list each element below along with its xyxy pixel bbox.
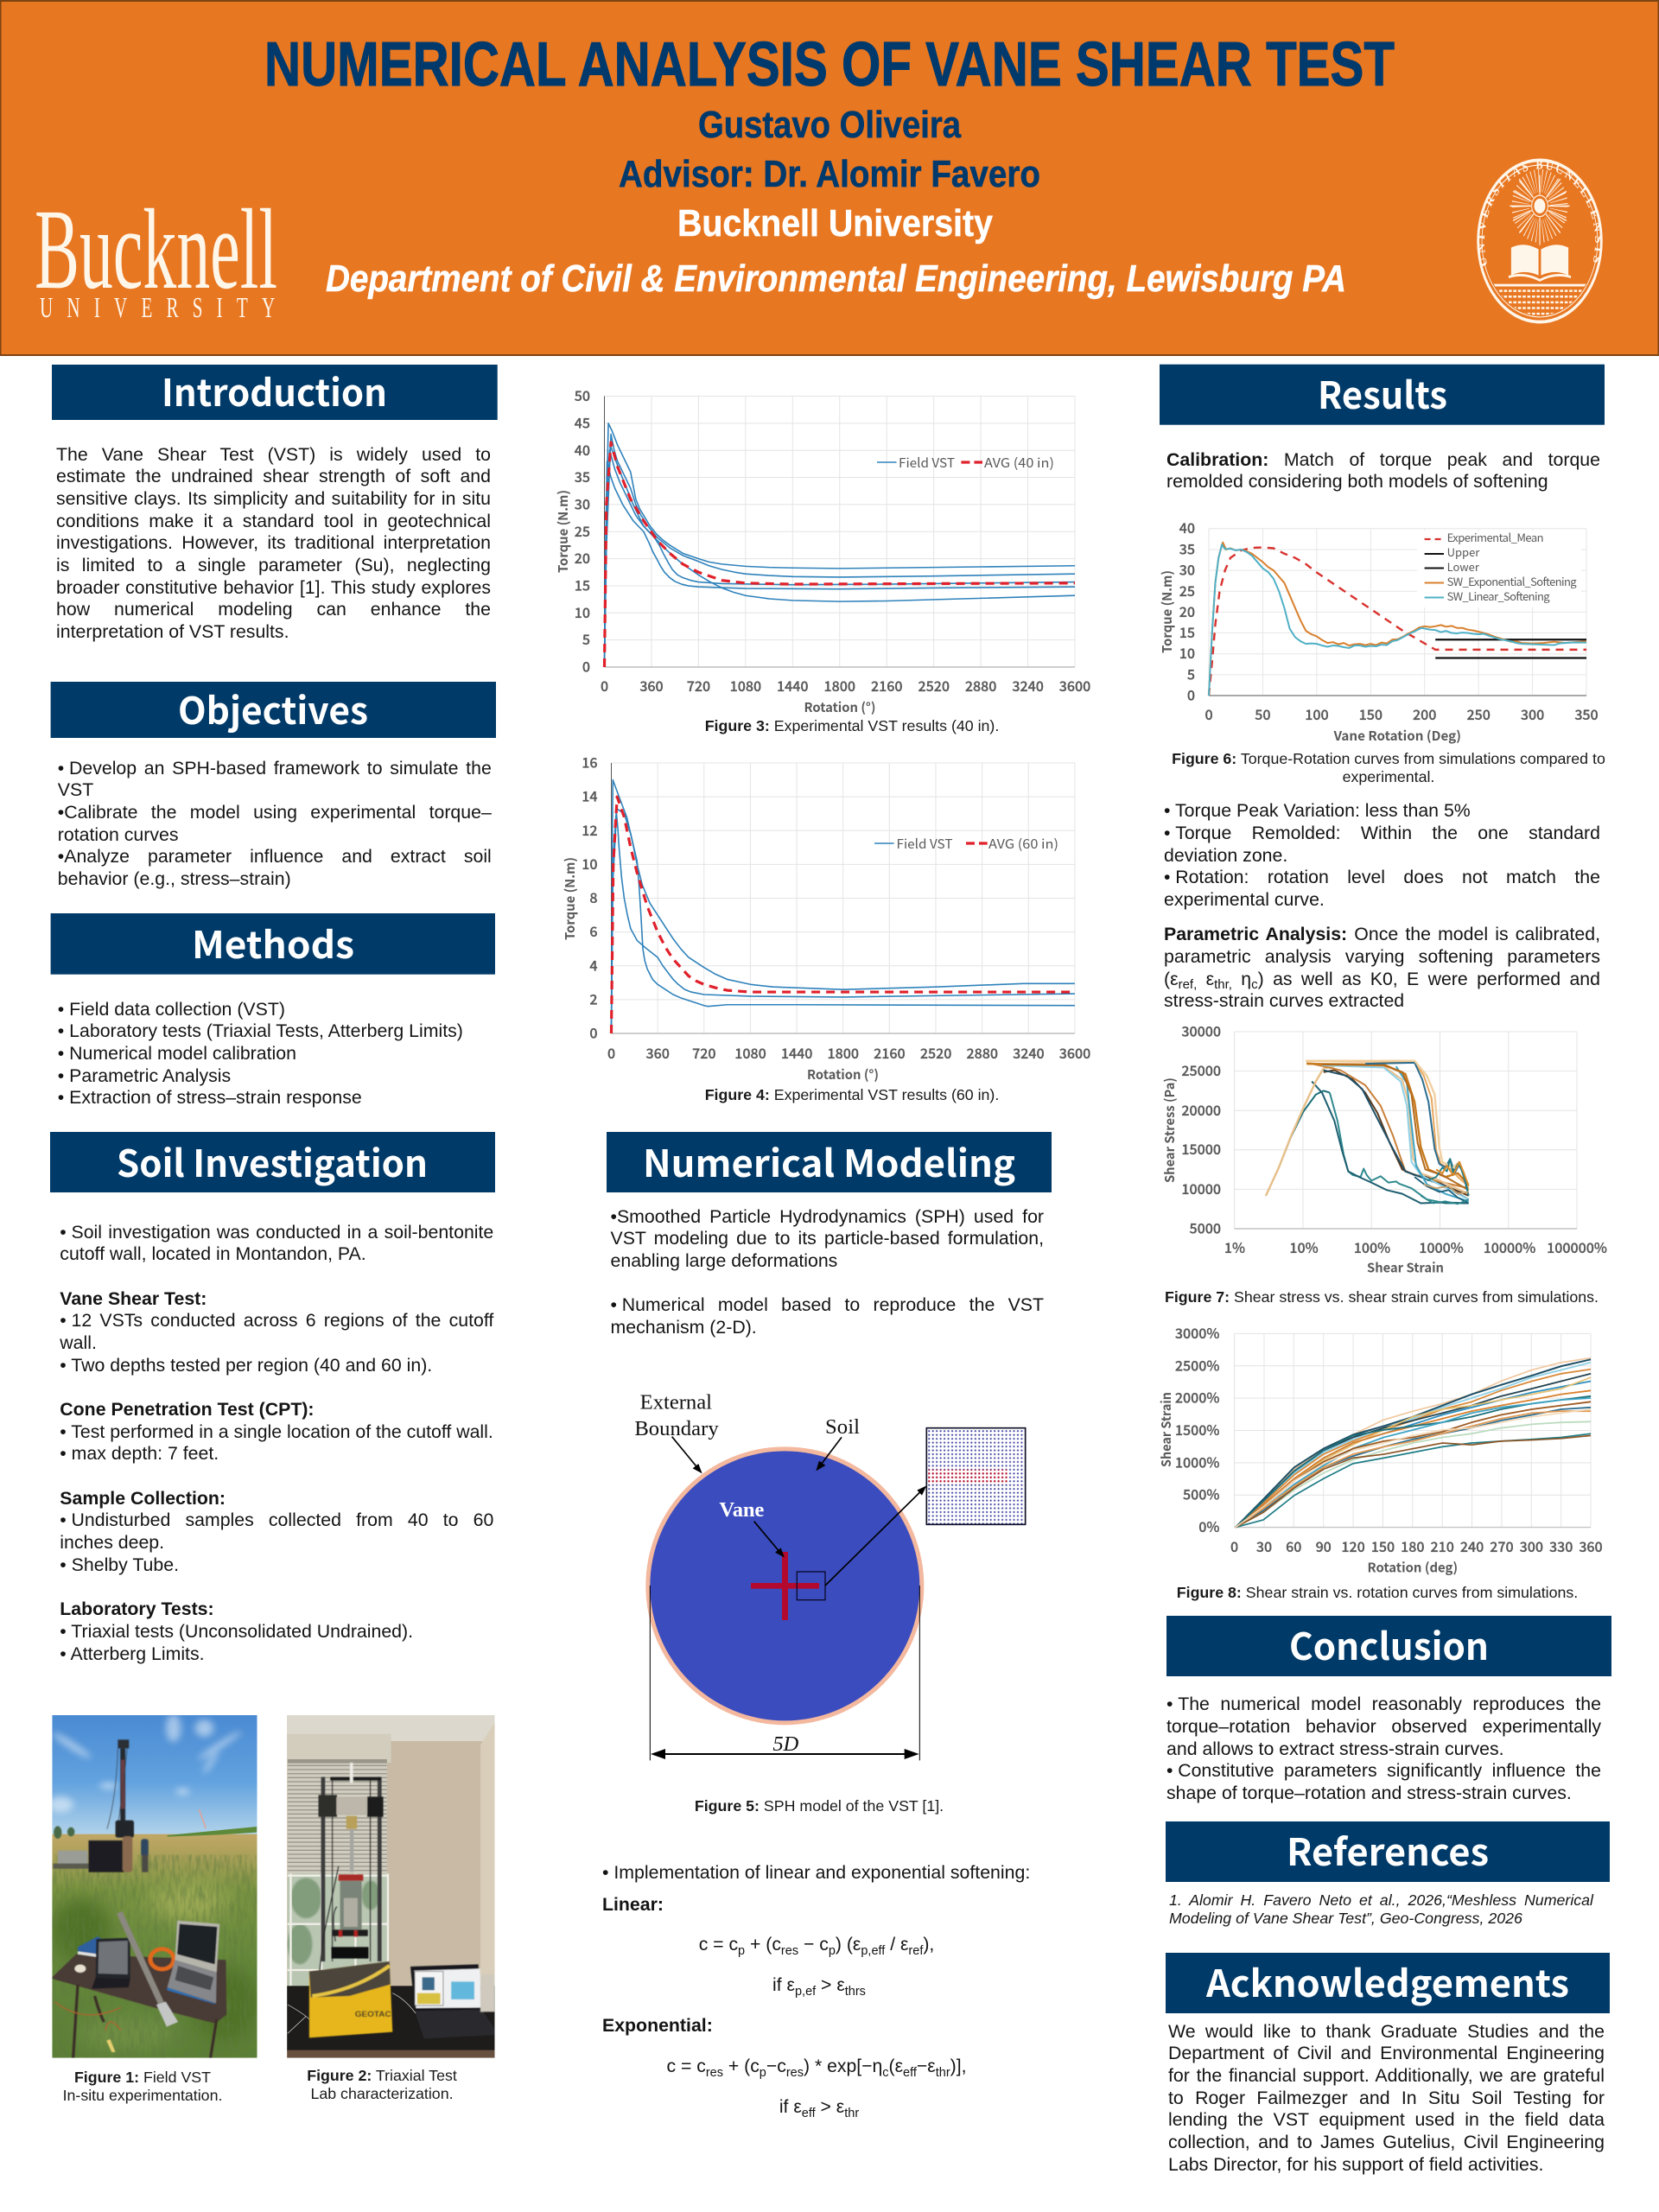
chart: Figure 7 shear stress vs shear strain: 15000 — [1181, 1138, 1221, 1159]
text block: calibration: Calibration: Match of torque peak and torque — [1166, 449, 1600, 470]
text block: soil investigation: • — [60, 1310, 67, 1331]
chart: Figure 8 shear strain vs rotation: 360 — [1579, 1535, 1603, 1556]
chart: Figure 6 torque-rotation simulations vs experimental: 35 — [1179, 537, 1195, 558]
chart: Figure 8 shear strain vs rotation — [1157, 1322, 1603, 1577]
chart: Figure 7 shear stress vs shear strain: 1% — [1224, 1236, 1245, 1257]
text block: methods: • Laboratory tests (Triaxial Tests, Atterberg Limits) — [58, 1020, 463, 1041]
text block: objectives: Develop an SPH-based framework to simulate the — [69, 757, 492, 778]
text block: acknowledgements: collection, and to James Gutelius, Civil Engineering — [1168, 2132, 1605, 2152]
text block: soil investigation: • Triaxial tests (Unconsolidated Undrained). — [60, 1621, 413, 1642]
text block: numerical modeling: mechanism (2-D). — [610, 1317, 757, 1338]
chart: Figure 7 shear stress vs shear strain: 20000 — [1181, 1099, 1221, 1120]
heading: Soil Investigation: Soil Investigation — [117, 1135, 428, 1188]
chart: Figure 3 torque vs rotation, 40 in: 20 — [575, 547, 590, 568]
chart legend: Figure 6: SW_Exponential_Softening — [1447, 573, 1577, 589]
text block: soil investigation: Soil investigation was conducted in a soil-bentonite — [71, 1222, 493, 1243]
chart: Figure 7 shear stress vs shear strain: 100000% — [1547, 1236, 1607, 1257]
chart: Figure 4 torque vs rotation, 60 in: 720 — [692, 1042, 715, 1063]
chart: Figure 7 shear stress vs shear strain: 25000 — [1181, 1059, 1221, 1080]
chart: Figure 4 torque vs rotation, 60 in: 10 — [582, 853, 598, 874]
chart: Figure 3 torque vs rotation, 40 in: Rotation (°) — [804, 698, 876, 716]
text block: calibration findings: • — [1164, 823, 1170, 843]
chart: Figure 4 torque vs rotation, 60 in: 0 — [589, 1021, 598, 1042]
chart: Figure 8 shear strain vs rotation: Rotation (deg) — [1367, 1559, 1458, 1577]
chart: Figure 4 torque vs rotation, 60 in — [561, 752, 1090, 1084]
chart: Figure 8 shear strain vs rotation: 60 — [1286, 1535, 1301, 1556]
text block: objectives: VST — [58, 779, 93, 800]
text block: soil investigation: Undisturbed samples collected from 40 to 60 — [71, 1510, 493, 1530]
diagram labels — [634, 1391, 860, 1756]
heading: Introduction: Introduction — [162, 364, 387, 417]
text block: objectives: behavior (e.g., stress–strain) — [58, 868, 291, 889]
caption: figure 4: Figure 4: Experimental VST results (60 in). — [705, 1086, 999, 1103]
chart legend: Figure 3: AVG (40 in) — [984, 454, 1054, 472]
chart: Figure 8 shear strain vs rotation: 120 — [1341, 1535, 1365, 1556]
text block: methods: • Numerical model calibration — [58, 1043, 296, 1064]
text block: conclusion: torque–rotation behavior observed experimentally — [1166, 1716, 1601, 1737]
icon: Bucknell wordmark: UNIVERSITY — [40, 292, 275, 324]
heading: linear softening: Linear: — [602, 1894, 664, 1915]
text block: numerical modeling: Numerical model based to reproduce the VST — [622, 1294, 1044, 1315]
chart: Figure 4 torque vs rotation, 60 in: 14 — [582, 785, 598, 806]
chart legend: Figure 6: Lower — [1447, 558, 1480, 575]
chart: Figure 3 torque vs rotation, 40 in: 2160 — [871, 675, 902, 696]
chart: Figure 4 torque vs rotation, 60 in: 1800 — [828, 1042, 859, 1063]
chart: Figure 8 shear strain vs rotation: 180 — [1401, 1535, 1424, 1556]
text block: conclusion: Constitutive parameters significantly influence the — [1178, 1760, 1601, 1781]
caption: figure 7: Figure 7: Shear stress vs. shear strain curves from simulations. — [1165, 1288, 1599, 1306]
title: NUMERICAL ANALYSIS OF VANE SHEAR TEST — [264, 29, 1395, 99]
chart: Figure 4 torque vs rotation, 60 in: 2520 — [920, 1042, 951, 1063]
chart: Figure 6 torque-rotation simulations vs experimental: 10 — [1179, 642, 1195, 663]
text block: acknowledgements: We would like to thank Graduate Studies and the — [1168, 2021, 1605, 2042]
text block: acknowledgements: Department of Civil and Environmental Engineering — [1168, 2043, 1605, 2063]
chart: Figure 8 shear strain vs rotation: 240 — [1460, 1535, 1484, 1556]
diagram labels: Vane — [719, 1498, 764, 1522]
text block: soil investigation: • Shelby Tube. — [60, 1554, 179, 1575]
chart: Figure 4 torque vs rotation, 60 in: 1080 — [734, 1042, 766, 1063]
chart: Figure 3 torque vs rotation, 40 in: 3240 — [1012, 675, 1044, 696]
chart: Figure 3 torque vs rotation, 40 in: 3600 — [1059, 675, 1090, 696]
heading: References — [1166, 1821, 1610, 1882]
text block: parametric analysis: (εref, εthr, ηc) as well as K0, E were performed and — [1164, 969, 1600, 992]
chart: Figure 8 shear strain vs rotation: 0 — [1230, 1535, 1238, 1556]
chart: Figure 6 torque-rotation simulations vs experimental — [1158, 517, 1599, 745]
chart legend: Figure 4 — [874, 835, 1058, 853]
chart: Figure 4 torque vs rotation, 60 in: 3240 — [1013, 1042, 1045, 1063]
chart: Figure 3 torque vs rotation, 40 in: 25 — [575, 520, 590, 541]
text block: acknowledgements — [1168, 2021, 1605, 2176]
chart: Figure 3 torque vs rotation, 40 in: 360 — [639, 675, 664, 696]
chart legend: Figure 6: SW_Linear_Softening — [1447, 588, 1550, 604]
heading: Introduction — [52, 364, 498, 420]
chart: Figure 4 torque vs rotation, 60 in: 8 — [589, 887, 598, 907]
caption: figure 5: Figure 5: SPH model of the VST [1]. — [695, 1797, 944, 1815]
chart: Figure 7 shear stress vs shear strain: 10000% — [1484, 1236, 1535, 1257]
caption: figure 2 — [307, 2067, 457, 2102]
chart: Figure 6 torque-rotation simulations vs experimental: 250 — [1467, 703, 1491, 724]
chart: Figure 3 torque vs rotation, 40 in: 0 — [601, 675, 608, 696]
text block: objectives — [57, 757, 492, 889]
text block: soil investigation: inches deep. — [60, 1532, 164, 1553]
chart: Figure 7 shear stress vs shear strain: Shear Stress (Pa) — [1160, 1077, 1179, 1183]
text block: conclusion: shape of torque–rotation and stress-strain curves. — [1166, 1783, 1572, 1803]
text block: calibration findings: Rotation: rotation level does not match the — [1175, 867, 1600, 887]
chart: Figure 6 torque-rotation simulations vs experimental: 25 — [1179, 580, 1195, 601]
load frame — [319, 1763, 384, 1981]
text block: numerical modeling — [610, 1206, 1044, 1338]
arrows and dimension lines — [650, 1437, 926, 1760]
chart: Figure 7 shear stress vs shear strain: 30000 — [1181, 1020, 1221, 1040]
text block: calibration findings: experimental curve. — [1164, 889, 1325, 910]
chart: Figure 8 shear strain vs rotation: 2000% — [1175, 1387, 1219, 1408]
heading: Numerical Modeling: Numerical Modeling — [643, 1135, 1015, 1188]
text block: soil investigation: cutoff wall, located in Montandon, PA. — [60, 1243, 366, 1264]
diagram: Figure 5 SPH model of the VST — [634, 1391, 1026, 1760]
text block: conclusion — [1166, 1694, 1601, 1803]
chart: Figure 7 shear stress vs shear strain: 1000% — [1419, 1236, 1464, 1257]
text block: soil investigation: • — [60, 1222, 67, 1243]
text block: objectives: •Calibrate the model using experimental torque– — [58, 802, 492, 823]
text block: soil investigation — [60, 1222, 494, 1664]
heading: References: References — [1287, 1823, 1489, 1877]
chart: Figure 8 shear strain vs rotation: Shear Strain — [1157, 1392, 1175, 1467]
text block: methods: • Parametric Analysis — [58, 1065, 231, 1086]
chart: Figure 7 shear stress vs shear strain: Shear Strain — [1367, 1259, 1444, 1277]
chart: Figure 8 shear strain vs rotation: 90 — [1316, 1535, 1332, 1556]
heading: Objectives: Objectives — [178, 682, 368, 735]
text block: introduction: how numerical modeling can enhance the — [56, 599, 491, 620]
chart legend: Figure 4: AVG (60 in) — [988, 835, 1058, 853]
text block: parametric analysis: Parametric Analysis: Once the model is calibrated, — [1164, 924, 1600, 944]
chart: Figure 3 torque vs rotation, 40 in: 2880 — [965, 675, 996, 696]
text block: introduction: interpretation of VST results. — [56, 621, 289, 642]
heading: Acknowledgements: Acknowledgements — [1205, 1955, 1569, 2008]
caption: figure 6 — [1172, 750, 1605, 785]
zoom box — [797, 1572, 825, 1600]
heading: exponential softening: Exponential: — [602, 2015, 713, 2036]
text block: methods: • Extraction of stress–strain response — [58, 1087, 362, 1108]
yellow control box: GEOTAC — [355, 2010, 391, 2019]
heading: Results: Results — [1318, 366, 1447, 420]
chart: Figure 6 torque-rotation simulations vs experimental: 5 — [1187, 664, 1195, 684]
text block: acknowledgements: lending the VST equipment used in the field data — [1168, 2109, 1605, 2130]
text block: objectives: • — [58, 757, 64, 778]
text block: numerical modeling: enabling large deformations — [610, 1250, 837, 1271]
chart: Figure 6 torque-rotation simulations vs experimental: Torque (N.m) — [1158, 570, 1176, 653]
text block: methods — [58, 999, 463, 1108]
chart legend: Figure 6: Experimental_Mean — [1447, 529, 1544, 545]
caption: figure 8: Figure 8: Shear strain vs. rotation curves from simulations. — [1177, 1584, 1578, 1601]
diagram labels: 5D — [772, 1732, 799, 1756]
chart: Figure 3 torque vs rotation, 40 in: Torque (N.m) — [554, 490, 572, 573]
icon: Bucknell wordmark: Bucknell — [35, 185, 277, 313]
chart: Figure 7 shear stress vs shear strain: 10000 — [1181, 1178, 1221, 1198]
text block: numerical modeling: • — [610, 1294, 617, 1315]
chart: Figure 4 torque vs rotation, 60 in: 2880 — [966, 1042, 998, 1063]
text block: parametric analysis — [1164, 924, 1600, 1011]
chart: Figure 6 torque-rotation simulations vs experimental: 50 — [1255, 703, 1271, 724]
caption: figure 2: Lab characterization. — [310, 2085, 454, 2102]
chart: Figure 4 torque vs rotation, 60 in: 360 — [646, 1042, 670, 1063]
text block: calibration findings: Torque Remolded: Within the one standard — [1175, 823, 1600, 843]
text block: calibration — [1166, 449, 1600, 492]
diagram labels: External — [640, 1391, 712, 1414]
caption: figure 6: experimental. — [1343, 768, 1434, 785]
caption: figure 3: Figure 3: Experimental VST results (40 in). — [705, 717, 999, 734]
chart: Figure 7 shear stress vs shear strain: 5000 — [1190, 1217, 1221, 1237]
department: Department of Civil & Environmental Engineering, Lewisburg PA — [326, 257, 1346, 300]
university: Bucknell University — [677, 202, 993, 245]
chart: Figure 3 torque vs rotation, 40 in: 10 — [575, 601, 590, 622]
text block: introduction: broader constitutive behavior [1]. This study explores — [56, 577, 491, 598]
caption: figure 1: In-situ experimentation. — [63, 2087, 222, 2104]
heading: Conclusion — [1166, 1616, 1611, 1676]
chart: Figure 3 torque vs rotation, 40 in: 40 — [575, 439, 590, 460]
text block: soil investigation: Sample Collection: — [60, 1488, 226, 1509]
text block: objectives: rotation curves — [58, 824, 178, 845]
author: Gustavo Oliveira — [698, 104, 961, 146]
icon: Bucknell wordmark — [35, 185, 277, 324]
chart: Figure 4 torque vs rotation, 60 in: 12 — [582, 819, 598, 840]
chart: Figure 6 torque-rotation simulations vs experimental: 0 — [1205, 703, 1213, 724]
chart: Figure 4 torque vs rotation, 60 in: Rotation (°) — [807, 1065, 879, 1084]
text block: introduction: The Vane Shear Test (VST) is widely used to — [56, 444, 491, 465]
heading: Methods — [51, 913, 495, 975]
chart: Figure 8 shear strain vs rotation: 270 — [1490, 1535, 1514, 1556]
chart: Figure 6 torque-rotation simulations vs experimental: 300 — [1521, 703, 1544, 724]
chart: Figure 4 torque vs rotation, 60 in: 1440 — [781, 1042, 812, 1063]
caption: figure 1 — [63, 2069, 222, 2104]
chart legend: Figure 6 — [1417, 529, 1581, 607]
text block: parametric analysis: parametric analysis varying softening parameters — [1164, 946, 1600, 967]
caption: figure 6: Figure 6: Torque-Rotation curves from simulations compared to — [1172, 750, 1605, 767]
photo: Figure 1 field VST — [48, 1714, 260, 2058]
heading: Conclusion: Conclusion — [1289, 1618, 1489, 1671]
equation: linear softening: c = cp + (cres − cp) (εp,eff / εref), — [699, 1935, 934, 1958]
chart: Figure 6 torque-rotation simulations vs experimental: Vane Rotation (Deg) — [1333, 727, 1461, 745]
diagram labels: Soil — [825, 1415, 860, 1439]
text block: introduction — [56, 444, 491, 642]
chart: Figure 3 torque vs rotation, 40 in: 50 — [575, 385, 590, 405]
text block: numerical modeling: •Smoothed Particle Hydrodynamics (SPH) used for — [610, 1206, 1044, 1227]
text block: introduction: investigations. However, its traditional interpretation — [56, 532, 491, 553]
chart: Figure 8 shear strain vs rotation: 300 — [1520, 1535, 1543, 1556]
header banner — [0, 0, 1659, 356]
text block: soil investigation: wall. — [60, 1332, 97, 1353]
text block: soil investigation: • Two depths tested per region (40 and 60 in). — [60, 1355, 432, 1376]
text block: acknowledgements: for the financial support. Additionally, we are grateful — [1168, 2065, 1605, 2086]
chart: Figure 6 torque-rotation simulations vs experimental: 15 — [1179, 621, 1195, 642]
chart: Figure 4 torque vs rotation, 60 in: 0 — [607, 1042, 615, 1063]
icon: university seal: UNIVERSITAS BUCNELLENSIS — [1479, 162, 1600, 268]
chart: Figure 4 torque vs rotation, 60 in: Torque (N.m) — [561, 857, 579, 940]
chart: Figure 4 torque vs rotation, 60 in: 2160 — [874, 1042, 906, 1063]
chart legend: Figure 3: Field VST — [899, 454, 955, 472]
vane cross — [751, 1552, 819, 1620]
chart: Figure 7 shear stress vs shear strain: 10% — [1289, 1236, 1319, 1257]
inset: particle detail — [926, 1428, 1026, 1524]
text block: acknowledgements: to Roger Failmezger and In Situ Soil Testing for — [1168, 2088, 1605, 2108]
chart: Figure 3 torque vs rotation, 40 in: 2520 — [918, 675, 950, 696]
text block: calibration findings: deviation zone. — [1164, 845, 1287, 866]
caption: figure 2: Figure 2: Triaxial Test — [307, 2067, 457, 2084]
text block: references — [1169, 1891, 1593, 1927]
heading: Soil Investigation — [50, 1132, 495, 1192]
diagram labels: Boundary — [634, 1417, 719, 1440]
heading: Objectives — [51, 682, 496, 738]
chart: Figure 3 torque vs rotation, 40 in: 5 — [582, 628, 590, 649]
chart: Figure 8 shear strain vs rotation: 0% — [1198, 1516, 1219, 1536]
chart: Figure 3 torque vs rotation, 40 in: 35 — [575, 466, 590, 486]
bench — [287, 1986, 494, 2050]
chart: Figure 6 torque-rotation simulations vs experimental: 350 — [1574, 703, 1599, 724]
text block: introduction: estimate the undrained shear strength of soft and — [56, 466, 491, 486]
text block: soil investigation: • Test performed in a single location of the cutoff wall. — [60, 1421, 493, 1442]
text block: soil investigation: Vane Shear Test: — [60, 1288, 207, 1309]
text block: soil investigation: Cone Penetration Test (CPT): — [60, 1399, 315, 1420]
text block: conclusion: The numerical model reasonably reproduces the — [1178, 1694, 1601, 1714]
equation: exponential softening: c = cres + (cp−cres) * exp[−ηc(εeff−εthr)], — [667, 2056, 966, 2080]
text block: soil investigation: Laboratory Tests: — [60, 1599, 214, 1619]
chart: Figure 3 torque vs rotation, 40 in: 15 — [575, 574, 590, 594]
text block: calibration findings: • — [1164, 867, 1170, 887]
text block: conclusion: • — [1166, 1694, 1173, 1714]
text block: methods: • Field data collection (VST) — [58, 999, 285, 1020]
chart: Figure 6 torque-rotation simulations vs experimental: 40 — [1179, 517, 1195, 537]
chart: Figure 6 torque-rotation simulations vs experimental: 30 — [1179, 558, 1195, 579]
advisor: Advisor: Dr. Alomir Favero — [619, 153, 1040, 195]
chart: Figure 8 shear strain vs rotation: 150 — [1371, 1535, 1395, 1556]
equation: linear condition: if εp,ef > εthrs — [772, 1975, 866, 1999]
chart: Figure 3 torque vs rotation, 40 in: 45 — [575, 411, 590, 432]
text block: numerical modeling: VST modeling due to its particle-based formulation, — [610, 1228, 1044, 1249]
chart: Figure 3 torque vs rotation, 40 in: 30 — [575, 493, 590, 513]
text block: introduction: sensitive clays. Its simplicity and suitability for in situ — [56, 488, 491, 509]
chart: Figure 4 torque vs rotation, 60 in: 16 — [582, 752, 598, 772]
chart: Figure 6 torque-rotation simulations vs experimental: 0 — [1187, 684, 1195, 705]
text block: conclusion: and allows to extract stress-strain curves. — [1166, 1738, 1504, 1759]
chart: Figure 4 torque vs rotation, 60 in: 4 — [589, 954, 598, 975]
chart: Figure 6 torque-rotation simulations vs experimental: 20 — [1179, 601, 1195, 621]
text block: soil investigation: 12 VSTs conducted across 6 regions of the cutoff — [71, 1310, 493, 1331]
chart: Figure 7 shear stress vs shear strain: 100% — [1354, 1236, 1390, 1257]
yellow control box — [309, 1961, 392, 2037]
chart legend: Figure 4: Field VST — [897, 835, 953, 853]
chart: Figure 4 torque vs rotation, 60 in: 2 — [589, 988, 598, 1008]
equation: exponential condition: if εeff > εthr — [779, 2097, 859, 2120]
text block: soil investigation: • max depth: 7 feet. — [60, 1443, 219, 1464]
text: softening intro: • Implementation of linear and exponential softening: — [602, 1862, 1030, 1883]
text block: calibration: remolded considering both models of softening — [1166, 471, 1548, 492]
text block: objectives: •Analyze parameter influence and extract soil — [58, 846, 492, 867]
text block: soil investigation: • — [60, 1510, 67, 1530]
caption: figure 1: Figure 1: Field VST — [74, 2069, 211, 2086]
chart: Figure 6 torque-rotation simulations vs experimental: 100 — [1305, 703, 1329, 724]
text block: references: 1. Alomir H. Favero Neto et al., 2026,“Meshless Numerical — [1169, 1891, 1593, 1908]
chart: Figure 3 torque vs rotation, 40 in: 720 — [687, 675, 710, 696]
chart: Figure 8 shear strain vs rotation: 1500% — [1175, 1419, 1219, 1440]
chart: Figure 3 torque vs rotation, 40 in — [554, 385, 1090, 716]
table and equipment — [52, 1912, 226, 2058]
text block: references: Modeling of Vane Shear Test”, Geo-Congress, 2026 — [1169, 1910, 1522, 1927]
text block: introduction: conditions make it a standard tool in geotechnical — [56, 511, 491, 531]
chart: Figure 8 shear strain vs rotation: 2500% — [1175, 1354, 1219, 1375]
chart: Figure 6 torque-rotation simulations vs experimental: 200 — [1413, 703, 1436, 724]
soil domain with external boundary — [645, 1446, 924, 1725]
chart: Figure 8 shear strain vs rotation: 500% — [1183, 1484, 1219, 1504]
chart: Figure 6 torque-rotation simulations vs experimental: 150 — [1359, 703, 1382, 724]
text block: parametric analysis: stress-strain curves extracted — [1164, 990, 1404, 1011]
chart: Figure 8 shear strain vs rotation: 210 — [1431, 1535, 1454, 1556]
chart: Figure 8 shear strain vs rotation: 1000% — [1175, 1451, 1219, 1471]
chart: Figure 4 torque vs rotation, 60 in: 6 — [589, 920, 598, 941]
chart: Figure 3 torque vs rotation, 40 in: 1800 — [824, 675, 855, 696]
heading: Results — [1160, 365, 1605, 425]
chart: Figure 3 torque vs rotation, 40 in: 0 — [582, 655, 590, 676]
heading: Methods: Methods — [192, 916, 354, 969]
icon: university seal — [1477, 159, 1603, 323]
text block: introduction: is limited to a single parameter (Su), neglecting — [56, 555, 491, 575]
chart: Figure 8 shear strain vs rotation: 30 — [1256, 1535, 1272, 1556]
chart legend: Figure 6: Upper — [1447, 543, 1480, 560]
text block: acknowledgements: Labs Director, for his support of field activities. — [1168, 2154, 1543, 2175]
photo: Figure 2 triaxial test — [287, 1715, 494, 2058]
chart: Figure 3 torque vs rotation, 40 in: 1440 — [777, 675, 809, 696]
text block: soil investigation: • Atterberg Limits. — [60, 1643, 205, 1664]
drill rig — [53, 1739, 149, 1872]
text block: calibration findings: • Torque Peak Variation: less than 5% — [1164, 800, 1471, 821]
laptop — [410, 1964, 494, 2038]
text block: calibration findings — [1164, 800, 1600, 910]
chart: Figure 8 shear strain vs rotation: 3000% — [1175, 1322, 1219, 1343]
chart: Figure 4 torque vs rotation, 60 in: 3600 — [1059, 1042, 1090, 1063]
chart: Figure 7 shear stress vs shear strain — [1160, 1020, 1607, 1277]
chart legend: Figure 3 — [877, 454, 1054, 472]
chart: Figure 8 shear strain vs rotation: 330 — [1549, 1535, 1573, 1556]
chart: Figure 3 torque vs rotation, 40 in: 1080 — [730, 675, 761, 696]
text block: conclusion: • — [1166, 1760, 1173, 1781]
